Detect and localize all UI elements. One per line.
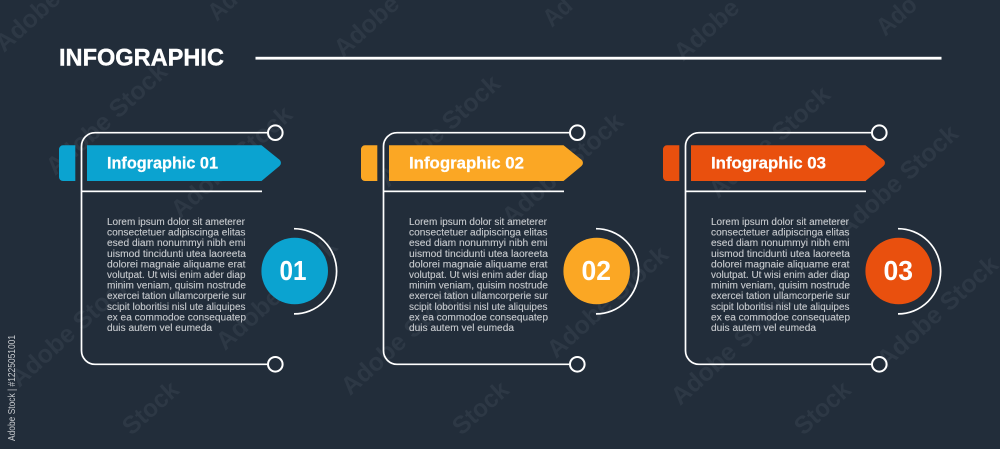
node: bottom: [268, 357, 283, 372]
body text: exercei tation ullamcorperie sur: [711, 291, 851, 302]
number badge: [563, 238, 630, 304]
title rule: [256, 57, 942, 60]
node: bottom: [872, 357, 887, 372]
heading: Infographic 01: [107, 154, 218, 172]
body text: [409, 217, 549, 334]
watermark pattern: Adobe Stock: [335, 277, 468, 401]
node: top: [872, 125, 887, 140]
watermark pattern: Adobe Stock: [871, 250, 1000, 374]
panel: infographic 03: [663, 125, 941, 372]
body text: volutpat. Ut wisi enim ader diap: [409, 270, 548, 281]
watermark pattern: Adobe Stock: [4, 269, 137, 393]
body text: dolorei magnaie aliquame erat: [107, 259, 246, 270]
body text: volutpat. Ut wisi enim ader diap: [711, 270, 850, 281]
number badge: [261, 238, 328, 304]
body text: consectetuer adipiscinga elitas: [711, 228, 850, 239]
body text: Lorem ipsum dolor sit ameterer: [107, 217, 246, 228]
watermark pattern: Adobe Stock: [703, 80, 836, 204]
body text: minim veniam, quisim nostrude: [107, 281, 246, 292]
watermark pattern: Adobe Stock: [496, 107, 629, 231]
tab: [663, 145, 679, 181]
watermark pattern: Adobe Stock: [40, 57, 173, 181]
body text: scipit loboritisi nisl ute aliquipes: [409, 302, 548, 313]
title: INFOGRAPHIC: [59, 44, 224, 72]
number arc: [898, 229, 941, 314]
panel: infographic 02: [361, 125, 639, 372]
body text: exercei tation ullamcorperie sur: [107, 291, 247, 302]
body text: duis autem vel eumeda: [409, 323, 514, 334]
number arc: [596, 229, 639, 314]
body text: esed diam nonummyi nibh emi: [409, 238, 548, 249]
body text: exercei tation ullamcorperie sur: [409, 291, 549, 302]
tab: [59, 145, 75, 181]
body text: ex ea commodoe consequatep: [107, 312, 246, 323]
number arc: [294, 229, 337, 314]
body text: Lorem ipsum dolor sit ameterer: [409, 217, 548, 228]
panel: infographic 01: [59, 125, 337, 372]
number: 02: [582, 255, 611, 286]
watermark pattern: Adobe Stock: [541, 240, 674, 364]
body text: scipit loboritisi nisl ute aliquipes: [107, 302, 246, 313]
watermark pattern: Adobe Stock: [210, 232, 343, 356]
arrow banner: [691, 145, 885, 181]
watermark pattern: Stock: [117, 376, 185, 441]
body text: uismod tincidunti utea laoreeta: [107, 249, 246, 260]
body text: ex ea commodoe consequatep: [409, 312, 548, 323]
watermark pattern: Stock: [789, 376, 857, 441]
divider: [685, 190, 866, 192]
stock id vertical text: Adobe Stock | #1225051001: [6, 335, 18, 441]
watermark pattern: Adobe Stock: [831, 119, 964, 243]
divider: [81, 190, 262, 192]
node: bottom: [570, 357, 585, 372]
heading: Infographic 02: [409, 154, 524, 172]
number: 03: [884, 255, 913, 286]
frame: [686, 133, 872, 364]
body text: ex ea commodoe consequatep: [711, 312, 850, 323]
body text: consectetuer adipiscinga elitas: [409, 228, 548, 239]
frame: [82, 133, 268, 364]
body text: Lorem ipsum dolor sit ameterer: [711, 217, 850, 228]
body text: duis autem vel eumeda: [711, 323, 816, 334]
number: 01: [280, 255, 306, 286]
body text: volutpat. Ut wisi enim ader diap: [107, 270, 246, 281]
body text: [711, 217, 851, 334]
body text: uismod tincidunti utea laoreeta: [711, 249, 850, 260]
arrow banner: [87, 145, 281, 181]
body text: esed diam nonummyi nibh emi: [107, 238, 246, 249]
body text: duis autem vel eumeda: [107, 323, 212, 334]
body text: consectetuer adipiscinga elitas: [107, 228, 246, 239]
watermark pattern: Adobe Stock: [165, 100, 298, 224]
body text: uismod tincidunti utea laoreeta: [409, 249, 548, 260]
watermark pattern: Adobe Stock: [373, 69, 506, 193]
body text: scipit loboritisi nisl ute aliquipes: [711, 302, 850, 313]
watermark pattern: Adobe Stock: [665, 287, 798, 411]
tab: [361, 145, 377, 181]
body text: esed diam nonummyi nibh emi: [711, 238, 850, 249]
watermark pattern: Stock: [447, 376, 515, 441]
body text: minim veniam, quisim nostrude: [409, 281, 548, 292]
body text: [107, 217, 247, 334]
node: top: [570, 125, 585, 140]
body text: dolorei magnaie aliquame erat: [409, 259, 548, 270]
frame: [384, 133, 570, 364]
heading: Infographic 03: [711, 154, 826, 172]
arrow banner: [389, 145, 583, 181]
number badge: [865, 238, 932, 304]
body text: minim veniam, quisim nostrude: [711, 281, 850, 292]
body text: dolorei magnaie aliquame erat: [711, 259, 850, 270]
node: top: [268, 125, 283, 140]
divider: [383, 190, 564, 192]
